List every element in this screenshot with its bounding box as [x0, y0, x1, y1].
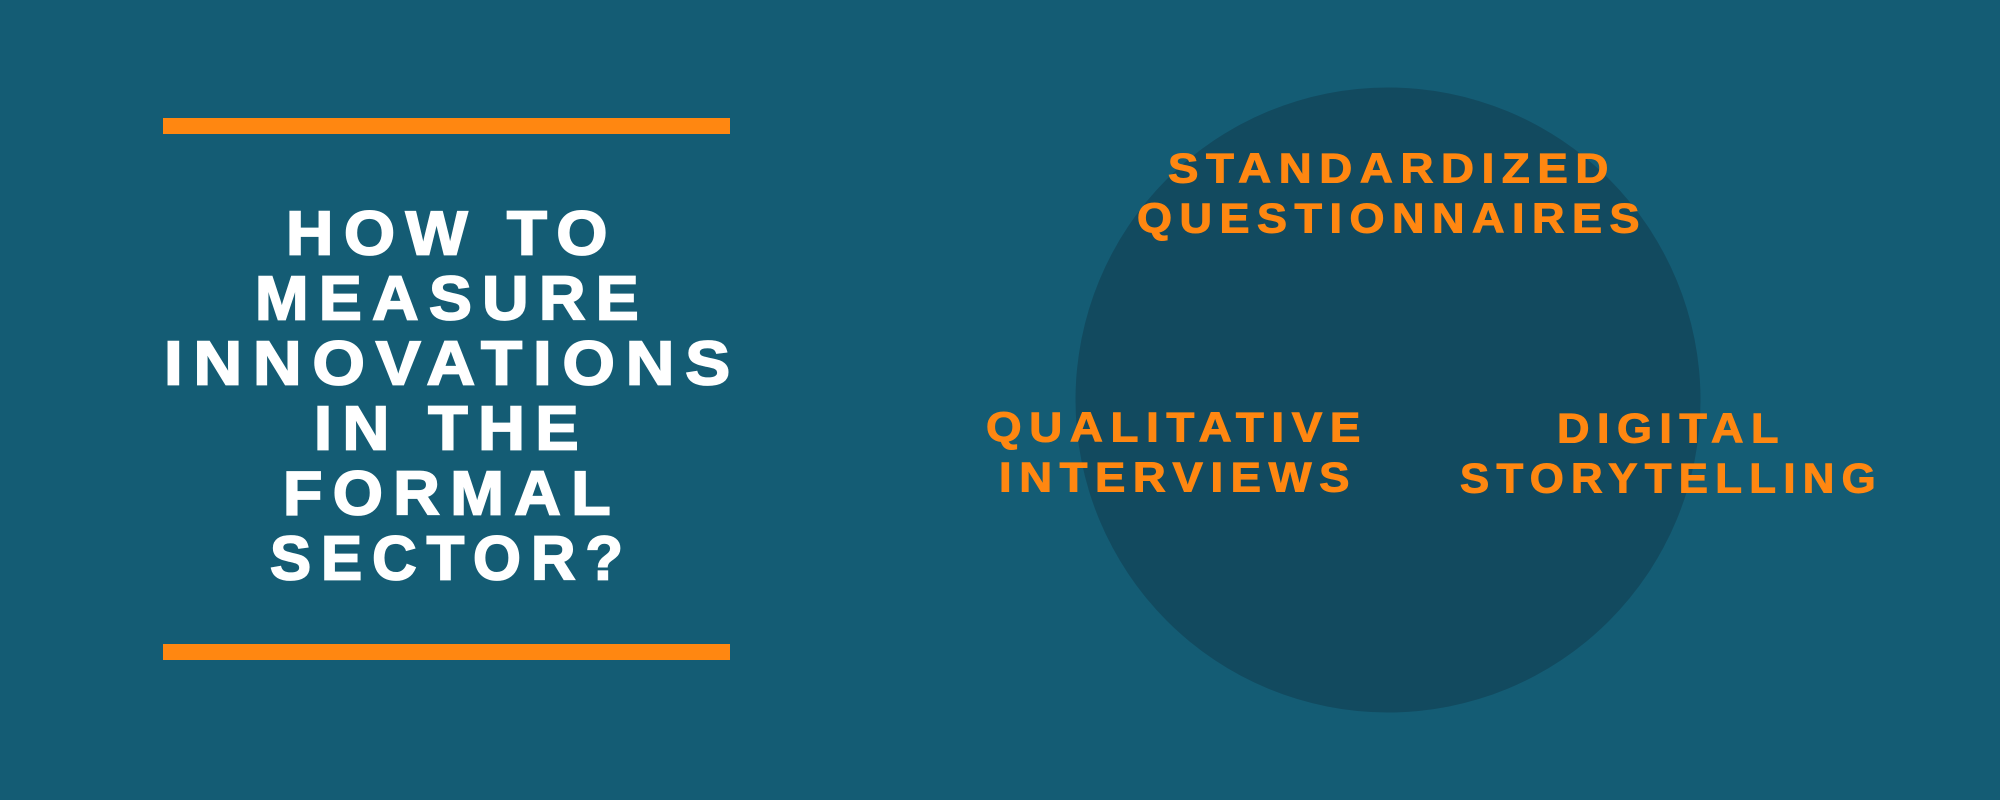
label: qualitative interviews: QUALITATIVE [986, 404, 1368, 450]
title: MEASURE [255, 264, 649, 334]
title [164, 200, 741, 594]
title: FORMAL [283, 460, 621, 528]
title: IN THE [314, 394, 589, 464]
label: digital storytelling: DIGITAL [1557, 404, 1786, 452]
title: HOW TO [286, 200, 618, 268]
label: standardized questionnaires: STANDARDIZED [1168, 144, 1616, 192]
top orange bar [163, 118, 730, 134]
title: SECTOR? [270, 524, 633, 594]
bottom orange bar [163, 644, 730, 660]
title: INNOVATIONS [164, 330, 741, 398]
label: qualitative interviews [986, 404, 1368, 500]
dark circle [1076, 88, 1700, 712]
label: digital storytelling: STORYTELLING [1460, 454, 1883, 502]
label: standardized questionnaires [1137, 144, 1647, 242]
label: digital storytelling [1460, 404, 1883, 502]
label: qualitative interviews: INTERVIEWS [999, 454, 1357, 500]
label: standardized questionnaires: QUESTIONNAIRES [1137, 194, 1647, 242]
